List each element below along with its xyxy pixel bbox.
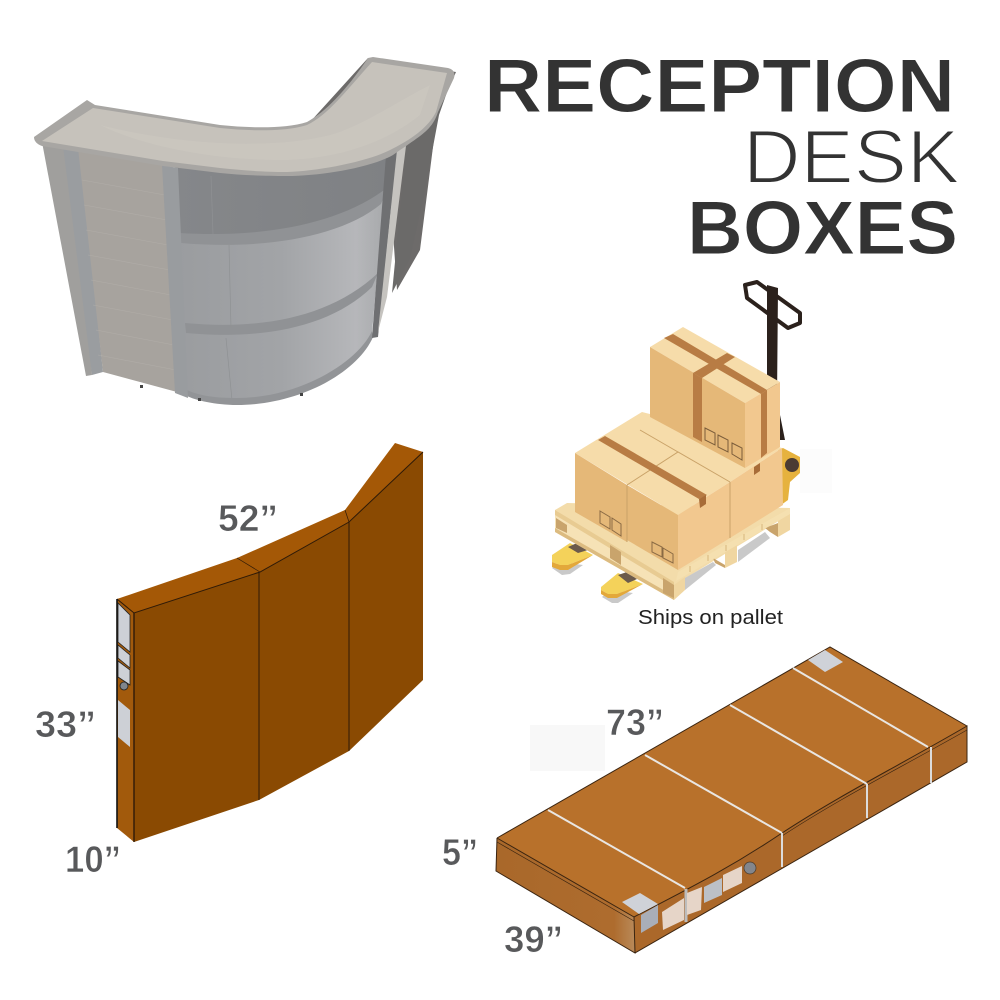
top carton (650, 327, 780, 468)
fork shadows (552, 562, 633, 603)
desk: right posts (372, 146, 406, 338)
tall shipping box (117, 443, 423, 842)
flat box: long side (634, 726, 967, 953)
desk: curved grey front (175, 150, 388, 405)
dimension: 10 inches: 10” (65, 839, 121, 880)
dimension: 5 inches: 5” (442, 832, 478, 873)
flat box: corner labels (622, 650, 843, 933)
dimension: 52 inches: 52” (218, 498, 278, 539)
lower cartons (575, 412, 783, 570)
flat shipping box (496, 647, 967, 953)
tall box: front face (134, 452, 423, 842)
reception desk illustration (34, 57, 456, 405)
desk: feet (140, 385, 303, 401)
desk: lower band (185, 273, 378, 335)
desk: back wing dark panels (310, 58, 456, 293)
pallet blocks (556, 518, 778, 598)
pallet caption: Ships on pallet (638, 607, 783, 629)
title line: BOXES: BOXES (687, 186, 958, 271)
title line: DESK: DESK (743, 115, 960, 200)
desk: left side panel (42, 140, 177, 392)
desk: front post (162, 165, 188, 398)
dimension: 39 inches: 39” (504, 919, 563, 960)
flat box: side labels (662, 862, 756, 930)
title line: RECEPTION: RECEPTION (484, 44, 955, 129)
tall box: end labels (118, 603, 130, 747)
dimension: 73 inches: 73” (606, 702, 664, 743)
flat box: top face (497, 647, 967, 917)
dimension labels (35, 498, 664, 960)
desk: counter top (34, 57, 454, 176)
pallet right blocks (674, 508, 790, 600)
pallet shadow patches (685, 532, 770, 590)
dimension: 33 inches: 33” (35, 704, 96, 745)
pallet truck handle (745, 282, 803, 505)
carton markings (600, 511, 673, 563)
flat box: short side (496, 838, 635, 953)
faint rectangle behind dimension (530, 725, 605, 771)
forks (552, 543, 643, 598)
title (484, 44, 960, 271)
flat box: straps (548, 668, 931, 922)
tall box: top face (117, 443, 423, 613)
wooden pallet (555, 503, 790, 600)
tall box: side face (117, 599, 134, 842)
faint rectangle beside truck (800, 449, 832, 493)
desk: upper band (180, 187, 388, 245)
carton markings (705, 428, 742, 460)
pallet illustration (552, 282, 832, 603)
